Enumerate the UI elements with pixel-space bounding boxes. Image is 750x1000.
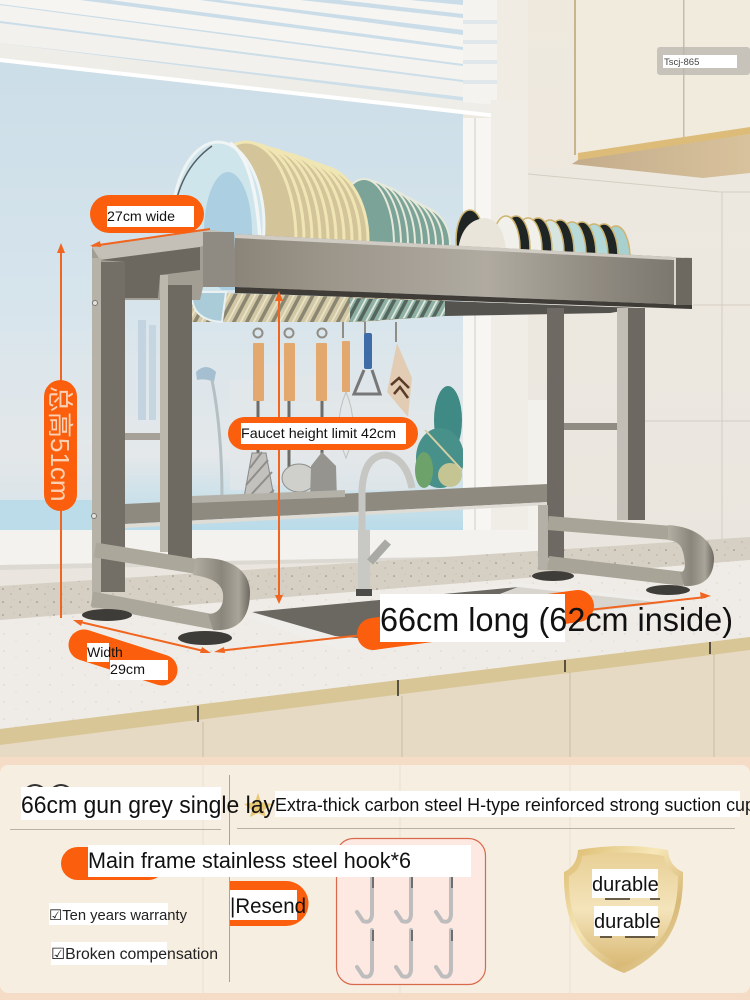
heading: product name: 66cm gun grey single lay: [21, 792, 275, 819]
slotted turner: [310, 452, 337, 500]
back shelf rail: [125, 484, 548, 528]
window blind: [0, 0, 497, 118]
model tag: Tscj-865: [664, 57, 699, 68]
under-rack dishes: [190, 292, 640, 322]
ladle: [282, 464, 316, 492]
window frame: [0, 0, 547, 570]
dimension: length 66cm: [214, 592, 733, 653]
dimension: length 66cm: 66cm long (62cm inside): [380, 601, 733, 638]
shield badge: durable: [592, 874, 659, 896]
whisk: [339, 392, 353, 458]
backsplash granite: [0, 537, 750, 622]
warranty item: ☑Ten years warranty: [49, 908, 188, 924]
left frame: [82, 230, 250, 645]
orange pill: main frame: Main frame stainless steel hook*6: [88, 848, 411, 873]
orange pill: resend: [230, 881, 308, 926]
dimension: depth 29cm: Width: [87, 644, 123, 660]
hook icons: [357, 877, 451, 977]
towel: [387, 343, 412, 417]
bowls: [455, 209, 631, 255]
bottom panel: [0, 757, 750, 1000]
wall background: [0, 0, 750, 760]
hanging utensils: [243, 322, 412, 503]
plants: [415, 386, 464, 488]
faucet: [356, 455, 412, 596]
rack top beam: [203, 232, 692, 309]
left top face: [92, 230, 233, 300]
utensil hooks: [254, 322, 396, 342]
dimension: depth 29cm: 29cm: [110, 662, 145, 677]
dimension: total height: [44, 243, 77, 618]
dimension: faucet height: Faucet height limit 42cm: [241, 425, 396, 441]
hooks box: [336, 838, 486, 984]
dimension: 27cm wide: 27cm wide: [107, 208, 175, 224]
shield badge: durable: [594, 911, 661, 933]
dimension: 27cm wide: [90, 195, 210, 247]
yellow plates: [234, 140, 370, 292]
green plates: [352, 178, 451, 294]
right frame: [532, 308, 714, 595]
window view: [0, 0, 464, 530]
orange pill: resend: |Resend: [230, 895, 306, 918]
wall tiles: [528, 174, 750, 540]
dimension: depth 29cm: [73, 620, 211, 680]
model tag: [657, 47, 750, 75]
shield badge: [564, 846, 683, 973]
upper cabinet: [572, 0, 750, 178]
wooden handles: [253, 341, 350, 401]
dimension: total height: 总高51cm: [45, 386, 75, 502]
spatula: [243, 452, 275, 503]
dishes on rack: [170, 140, 631, 294]
dimension: faucet height: [228, 291, 418, 604]
lower cabinets: [0, 637, 750, 760]
sink: [245, 583, 690, 650]
countertop: [0, 560, 750, 729]
orange pill: main frame: [61, 845, 471, 880]
compensation item: ☑Broken compensation: [51, 946, 218, 963]
star icon: [244, 793, 272, 817]
peeler: [354, 333, 380, 394]
glass lid: [172, 142, 264, 308]
